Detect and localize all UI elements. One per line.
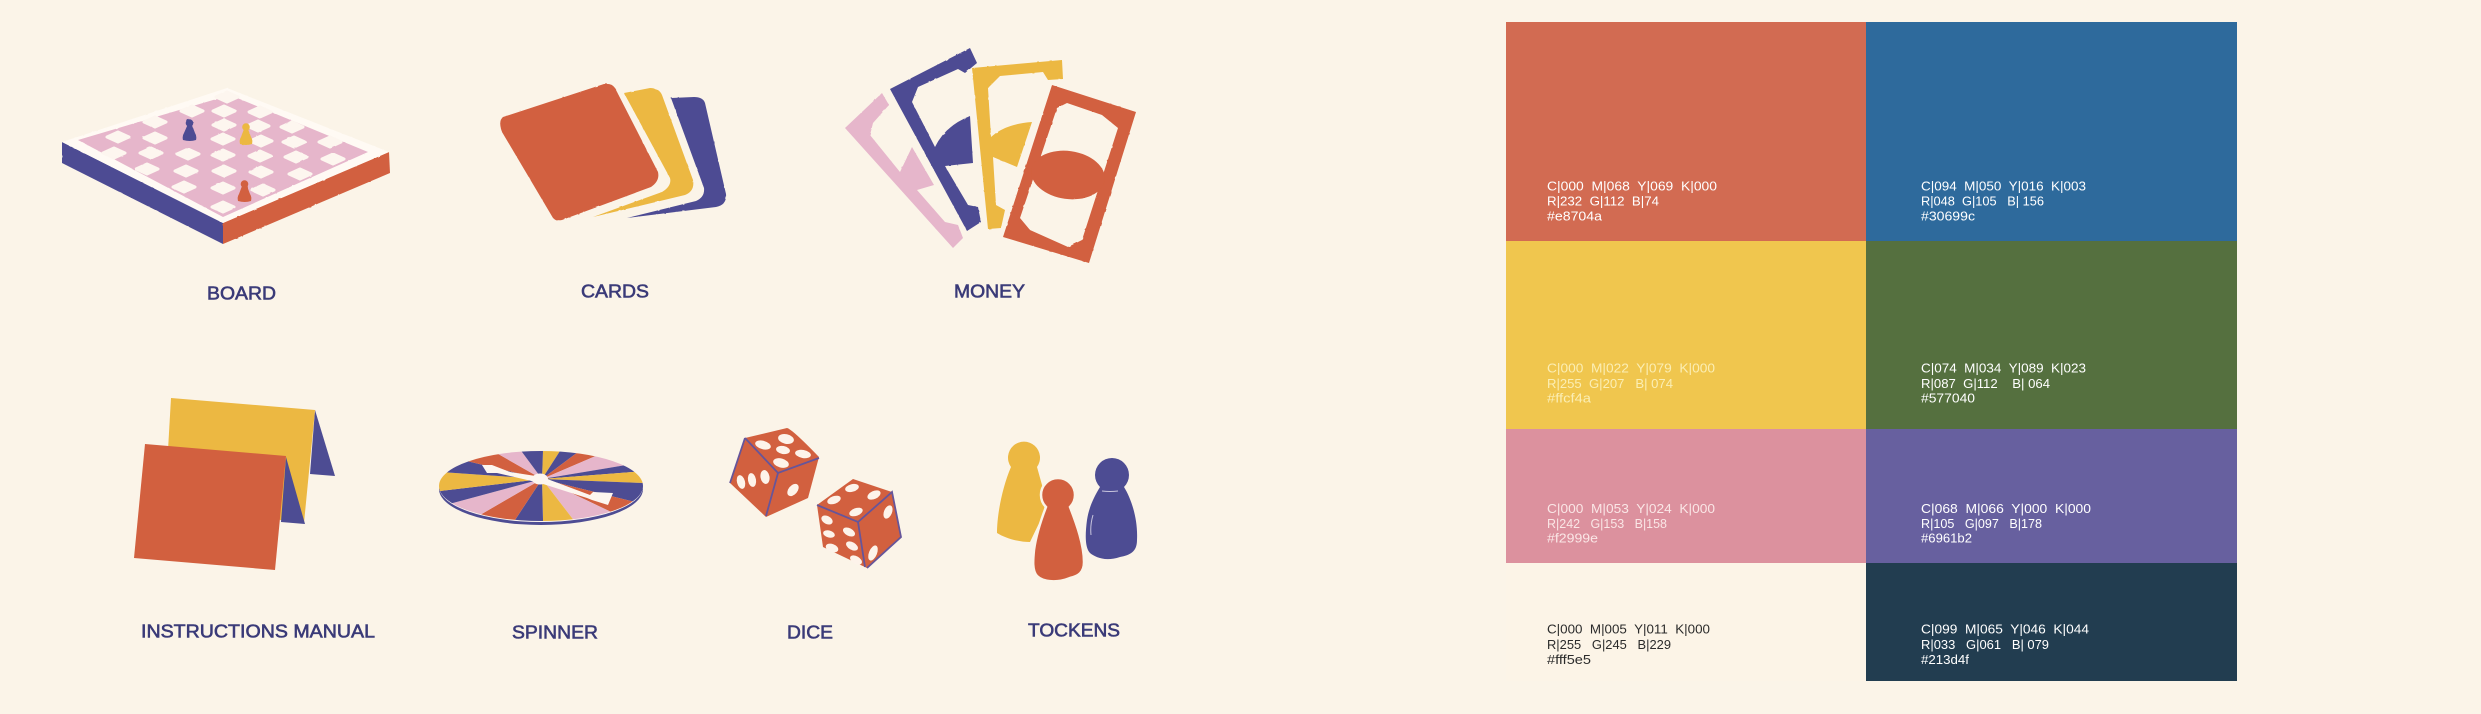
swatch: green: C|074 M|034 Y|089 K|023 (1921, 362, 2086, 376)
icon: cards (500, 84, 726, 220)
swatch: purple: R|105 G|097 B|178 (1921, 517, 2042, 531)
swatch: red: C|000 M|068 Y|069 K|000 (1547, 180, 1717, 194)
icon: tokens (997, 442, 1137, 581)
swatch: yellow: #ffcf4a (1547, 392, 1591, 406)
swatch: yellow: C|000 M|022 Y|079 K|000 (1547, 362, 1715, 376)
swatch: yellow: R|255 G|207 B| 074 (1547, 377, 1673, 391)
icon: board (62, 88, 390, 244)
icon: dice (730, 428, 901, 568)
swatch: red: R|232 G|112 B|74 (1547, 194, 1659, 208)
die: left (730, 428, 819, 517)
swatch: pink (1506, 429, 1866, 563)
bill: orange (1003, 85, 1136, 263)
icon: spinner (439, 451, 643, 525)
swatch: blue: R|048 G|105 B| 156 (1921, 194, 2044, 208)
swatch: blue (1866, 22, 2237, 241)
swatch: yellow (1506, 241, 1866, 429)
bill: yellow (972, 60, 1063, 229)
swatch: cream: #fff5e5 (1547, 653, 1591, 667)
swatch: green: #577040 (1921, 392, 1975, 406)
bill: pink (845, 93, 963, 248)
token: blue (1086, 458, 1137, 559)
swatch: purple: #6961b2 (1921, 532, 1972, 546)
label: spinner: SPINNER (512, 622, 598, 642)
swatch: blue: C|094 M|050 Y|016 K|003 (1921, 180, 2086, 194)
icon: money (845, 48, 1136, 263)
swatch: navy: C|099 M|065 Y|046 K|044 (1921, 622, 2089, 636)
swatch: navy (1866, 563, 2237, 681)
label: cards: CARDS (581, 280, 649, 302)
swatch: purple (1866, 429, 2237, 563)
swatch: purple: C|068 M|066 Y|000 K|000 (1921, 502, 2091, 516)
token: yellow (997, 442, 1044, 542)
label: board: BOARD (207, 282, 276, 304)
label: instructions manual: INSTRUCTIONS MANUAL (141, 620, 375, 642)
token: red (1033, 478, 1084, 581)
swatch: green: R|087 G|112 B| 064 (1921, 377, 2050, 391)
pawn: yellow (240, 123, 252, 145)
swatch: red (1506, 22, 1866, 241)
label: tokens: TOCKENS (1028, 620, 1120, 640)
icon: instructions manual (134, 398, 335, 570)
swatch: pink: #f2999e (1547, 532, 1598, 546)
label: dice: DICE (787, 622, 833, 642)
swatch: navy: #213d4f (1921, 653, 1970, 667)
swatch: blue: #30699c (1921, 210, 1975, 224)
swatch: navy: R|033 G|061 B| 079 (1921, 638, 2049, 652)
swatch: cream: C|000 M|005 Y|011 K|000 (1547, 622, 1710, 636)
swatch: green (1866, 241, 2237, 429)
swatch: cream: R|255 G|245 B|229 (1547, 638, 1671, 652)
swatch: red: #e8704a (1547, 210, 1602, 224)
pawn: blue (183, 119, 196, 141)
pawn: red (238, 180, 251, 202)
label: money: MONEY (954, 280, 1025, 302)
bill: blue (890, 48, 981, 231)
spinner arrow (482, 465, 613, 505)
swatch: pink: C|000 M|053 Y|024 K|000 (1547, 502, 1715, 516)
die: right (817, 479, 901, 568)
swatch: pink: R|242 G|153 B|158 (1547, 517, 1667, 531)
swatch: cream (1506, 563, 1866, 681)
